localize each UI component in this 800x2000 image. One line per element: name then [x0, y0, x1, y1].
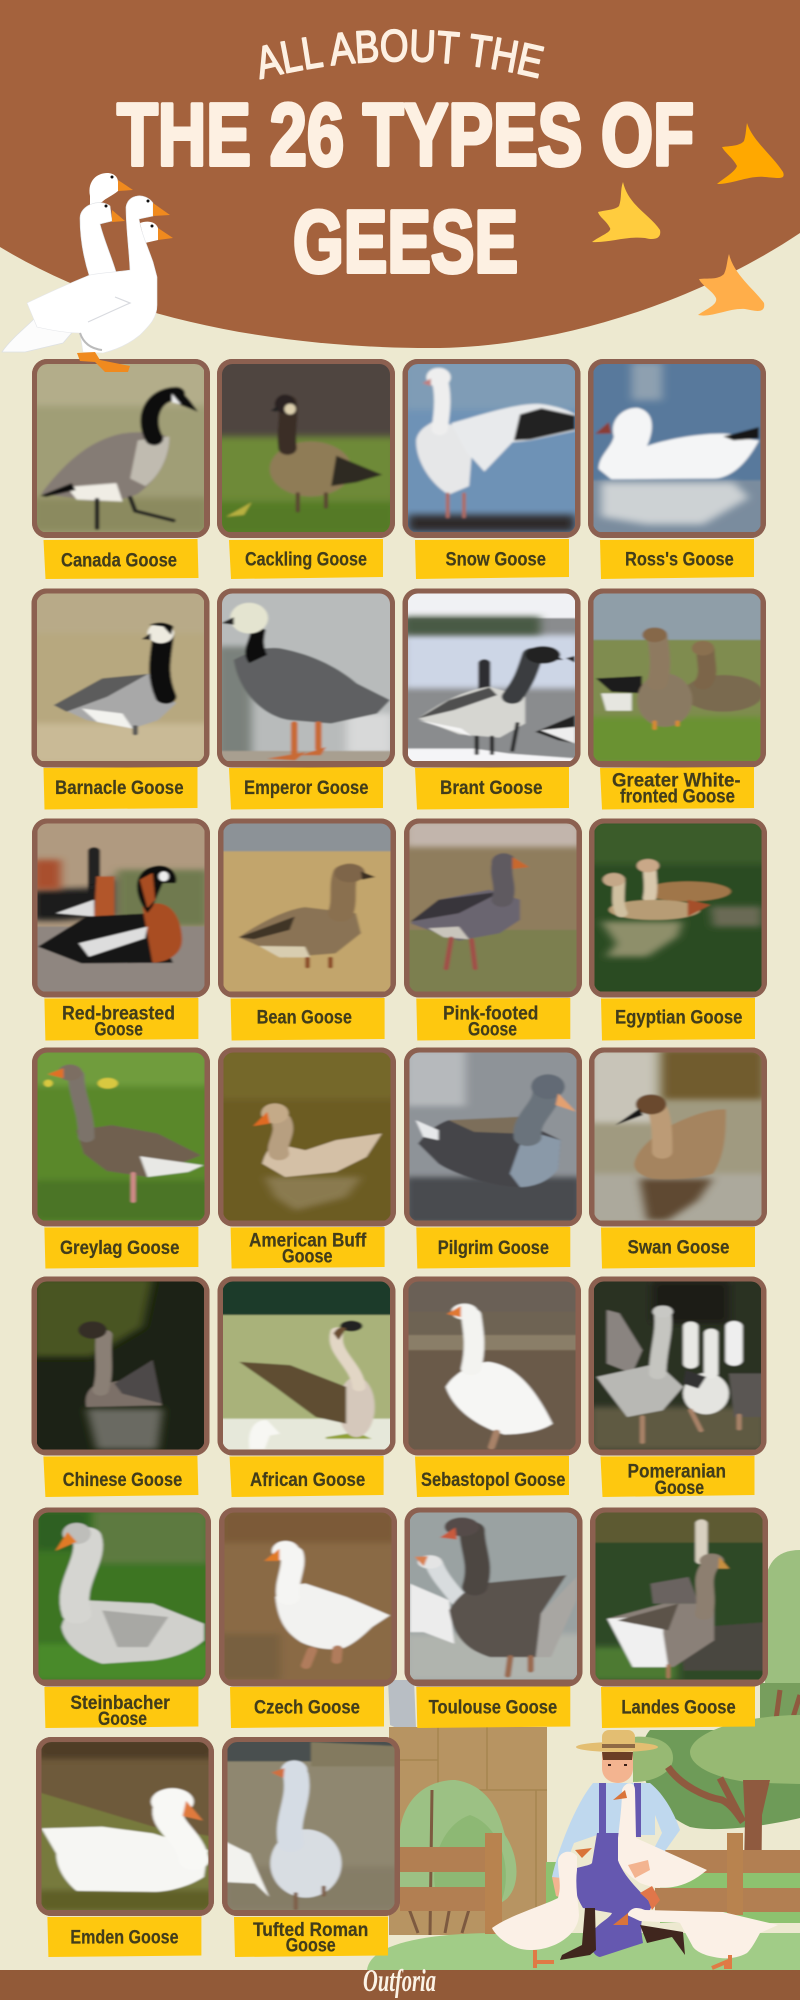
- frame: [405, 591, 578, 765]
- label: Brant Goose: [440, 777, 543, 799]
- face: [602, 1752, 633, 1783]
- label: Snow Goose: [446, 548, 546, 570]
- label: Cackling Goose: [245, 548, 367, 570]
- shirt: [552, 1783, 680, 1879]
- label: Greylag Goose: [60, 1237, 180, 1259]
- frame: [34, 821, 208, 995]
- label: fronted Goose: [620, 786, 735, 808]
- photo: [223, 1282, 390, 1450]
- photo: [38, 824, 204, 992]
- label: Toulouse Goose: [429, 1696, 557, 1718]
- label: Egyptian Goose: [615, 1006, 743, 1028]
- farmer: [552, 1730, 685, 1960]
- card: Barnacle Goose: [31, 588, 210, 810]
- photo: [38, 1512, 206, 1680]
- label: [416, 1686, 570, 1728]
- frame: [220, 1050, 394, 1224]
- farm scene: [367, 1550, 800, 1970]
- frame: [405, 362, 578, 536]
- card: Steinbacher Goose: [33, 1508, 212, 1730]
- frame: [406, 821, 580, 995]
- card: Swan Goose: [589, 1048, 768, 1268]
- card: Canada Goose: [31, 359, 210, 579]
- goose right: [613, 1908, 778, 1969]
- label: Pilgrim Goose: [438, 1237, 549, 1259]
- footer bar: [0, 1970, 800, 2000]
- label: [229, 539, 383, 579]
- card: Bean Goose: [218, 818, 397, 1040]
- label: Emperor Goose: [244, 777, 369, 799]
- photo: [37, 364, 204, 532]
- photo: [410, 824, 576, 992]
- stone: [388, 1680, 416, 1732]
- label: [44, 767, 198, 810]
- label: [234, 1916, 388, 1957]
- frame: [220, 591, 392, 765]
- barn: [389, 1727, 547, 1935]
- label: Ross's Goose: [625, 548, 734, 570]
- label: [416, 998, 570, 1041]
- icon: goose footprint light orange: [698, 254, 764, 316]
- frame: [34, 362, 208, 536]
- photo: [42, 1742, 208, 1910]
- label: Pomeranian: [628, 1461, 726, 1483]
- photo: [594, 594, 760, 761]
- frame: [222, 1510, 394, 1684]
- photo: [38, 1052, 204, 1220]
- photo: [594, 364, 760, 532]
- card: Czech Goose: [219, 1508, 398, 1728]
- label: [600, 767, 754, 810]
- boots: [560, 1908, 596, 1960]
- photo: [408, 1282, 576, 1450]
- main goose: [27, 196, 170, 353]
- frame: [38, 1740, 212, 1914]
- right tree: [633, 1715, 800, 1915]
- photo: [37, 594, 204, 761]
- label: Goose: [286, 1935, 336, 1957]
- label: Goose: [655, 1477, 704, 1499]
- photo: [594, 1052, 762, 1220]
- label: Goose: [282, 1246, 333, 1268]
- frame: [220, 362, 392, 536]
- photo: [224, 1512, 392, 1680]
- frame: [590, 362, 764, 536]
- label: Pink-footed: [443, 1002, 538, 1024]
- card: American Buff Goose: [218, 1048, 397, 1268]
- label: Emden Goose: [70, 1926, 179, 1948]
- fourth goose head: [140, 222, 173, 243]
- frame: [591, 1279, 764, 1453]
- frame: [220, 821, 394, 995]
- photo: [228, 1742, 394, 1910]
- frame: [592, 1510, 766, 1684]
- frame: [220, 1279, 393, 1453]
- photo: [224, 1052, 390, 1220]
- label: Barnacle Goose: [55, 777, 184, 799]
- label: Red-breasted: [62, 1002, 175, 1024]
- label: Chinese Goose: [63, 1469, 182, 1491]
- frame: [407, 1510, 580, 1684]
- frame: [34, 1279, 207, 1453]
- label: [415, 767, 569, 810]
- label: [44, 539, 198, 579]
- label: [416, 1227, 570, 1268]
- frame: [590, 591, 764, 765]
- card: Egyptian Goose: [589, 818, 768, 1040]
- label: Czech Goose: [254, 1696, 360, 1718]
- label: Goose: [94, 1019, 143, 1041]
- title line two: GEESE: [293, 192, 518, 291]
- card: Pink-footed Goose: [404, 818, 583, 1041]
- fence: [400, 1833, 800, 1934]
- photo: [410, 1052, 576, 1220]
- label: [601, 1686, 755, 1728]
- label: [415, 1456, 569, 1497]
- ground: [367, 1933, 800, 1970]
- second goose: [80, 203, 125, 278]
- frame: [34, 591, 207, 765]
- frame: [592, 821, 764, 995]
- frame: [36, 1510, 208, 1684]
- card: Pilgrim Goose: [404, 1048, 583, 1268]
- label: Bean Goose: [257, 1006, 352, 1028]
- goose feet: [77, 352, 130, 372]
- card: African Goose: [218, 1276, 396, 1497]
- label: Goose: [468, 1019, 517, 1041]
- back goose tail: [2, 275, 100, 352]
- photo: [596, 1512, 762, 1680]
- photo: [594, 1282, 761, 1450]
- left tree: [400, 1780, 516, 1935]
- label: [600, 539, 754, 579]
- card: Greylag Goose: [32, 1048, 211, 1268]
- photo: [408, 594, 575, 761]
- frame: [406, 1050, 580, 1224]
- card: Cackling Goose: [213, 359, 398, 579]
- card: Snow Goose: [402, 359, 581, 579]
- card: Sebastopol Goose: [403, 1276, 581, 1497]
- overalls: [572, 1783, 652, 1957]
- photo: [37, 1282, 204, 1450]
- card: Ross's Goose: [588, 359, 766, 579]
- photo: [222, 594, 390, 761]
- label: African Goose: [250, 1469, 365, 1491]
- icon: goose footprint orange: [717, 123, 784, 184]
- card: Emperor Goose: [216, 588, 395, 810]
- hat: [576, 1730, 658, 1752]
- label: American Buff: [249, 1230, 367, 1252]
- label: Canada Goose: [61, 550, 177, 572]
- label: Landes Goose: [621, 1696, 736, 1718]
- card: Chinese Goose: [32, 1276, 210, 1497]
- top goose: [89, 173, 133, 206]
- label: Goose: [98, 1708, 147, 1730]
- label: Steinbacher: [70, 1692, 170, 1714]
- card: Red-breasted Goose: [32, 818, 210, 1041]
- hands: [552, 1860, 650, 1898]
- label: [600, 1456, 754, 1499]
- label: [44, 998, 198, 1041]
- logo: Outforia: [363, 1962, 436, 1998]
- tall tree background: [765, 1550, 800, 1683]
- label: [43, 1456, 198, 1497]
- label: [231, 1227, 385, 1268]
- white geese illustration: [2, 173, 173, 372]
- frame: [406, 1279, 578, 1453]
- photo: [222, 364, 390, 532]
- goose left: [492, 1848, 592, 1968]
- label: Greater White-: [612, 770, 741, 792]
- photo: [224, 824, 390, 992]
- label: Swan Goose: [628, 1236, 730, 1258]
- label: Tufted Roman: [253, 1919, 368, 1941]
- label: [229, 767, 383, 810]
- goose centre: [613, 1783, 707, 1888]
- card: Pomeranian Goose: [588, 1276, 767, 1499]
- label: [44, 1686, 198, 1730]
- frame: [224, 1740, 398, 1914]
- background grass band: [660, 1873, 800, 1923]
- header banner: [0, 0, 800, 348]
- label: [415, 539, 569, 579]
- photo: [594, 824, 762, 992]
- label: Sebastopol Goose: [421, 1469, 566, 1491]
- card: Landes Goose: [590, 1508, 769, 1728]
- photo: [410, 1512, 577, 1680]
- card: Toulouse Goose: [404, 1508, 583, 1728]
- label: [230, 1456, 384, 1497]
- label: [231, 998, 385, 1040]
- card: Brant Goose: [402, 588, 581, 810]
- icon: goose footprint yellow: [592, 182, 660, 242]
- label: [44, 1227, 198, 1268]
- card: Greater White-fronted Goose: [588, 588, 767, 810]
- subtitle: ALL ABOUT THE: [259, 28, 544, 80]
- frame: [34, 1050, 208, 1224]
- label: [47, 1916, 201, 1957]
- label: [601, 1227, 755, 1268]
- card: Emden Goose: [36, 1737, 215, 1957]
- card: Tufted Roman Goose: [222, 1737, 401, 1957]
- frame: [592, 1050, 764, 1224]
- photo: [408, 364, 575, 532]
- label: [601, 998, 755, 1040]
- label: [230, 1686, 384, 1728]
